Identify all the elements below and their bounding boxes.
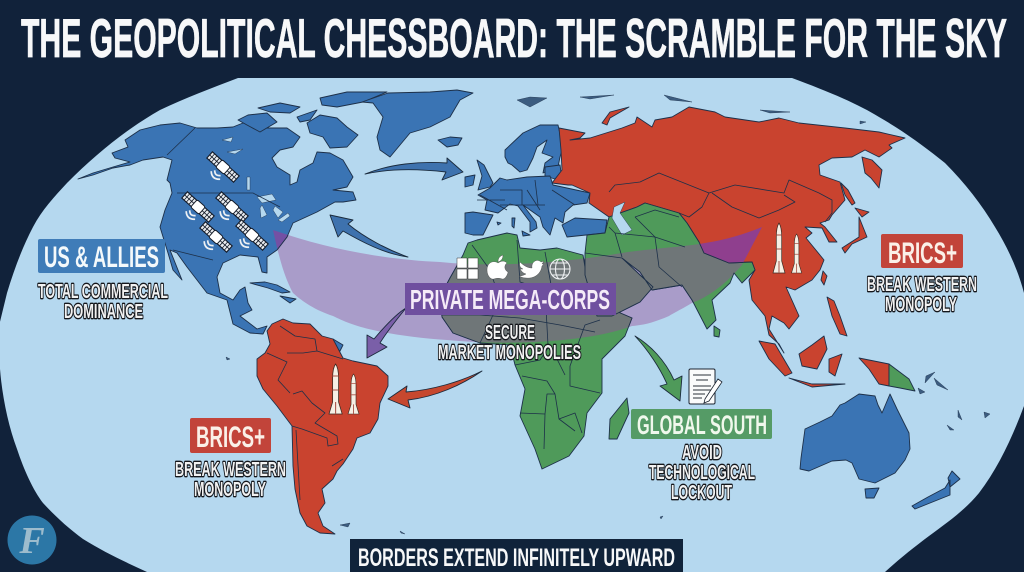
label: US and Allies xyxy=(38,239,168,323)
Kamchatka xyxy=(862,157,882,188)
Sri Lanka xyxy=(714,326,720,337)
label: BRICS plus, South America: BREAK WESTERN xyxy=(175,459,286,481)
Novaya Zemlya xyxy=(602,107,629,125)
footer banner xyxy=(350,539,683,572)
label: BRICS plus, South America: BRICS+ xyxy=(196,421,265,454)
Britain and Ireland xyxy=(465,160,493,190)
Arctic islands xyxy=(238,92,387,148)
Middle East, Central and South Asia xyxy=(585,203,755,329)
land: blue US and allies xyxy=(78,90,960,509)
label: Global South: TECHNOLOGICAL xyxy=(649,462,755,484)
label: BRICS plus, South America: MONOPOLY xyxy=(194,479,266,501)
label: Global South: LOCKOUT xyxy=(671,482,732,504)
Baltic states xyxy=(545,165,561,179)
logo badge: F xyxy=(18,520,45,562)
land: green Global South xyxy=(440,203,915,469)
icons: tech company logos xyxy=(457,255,570,279)
label: Private Mega-Corps: SECURE xyxy=(485,322,535,344)
arrow: red to South America xyxy=(388,371,482,408)
Madagascar xyxy=(609,398,629,439)
label: US and Allies: DOMINANCE xyxy=(64,301,143,323)
arrow: mega-corps to North America xyxy=(330,215,408,257)
purple satellite band xyxy=(273,227,762,343)
label: Global South: GLOBAL SOUTH xyxy=(637,410,767,440)
label: BRICS plus, Asia: BRICS+ xyxy=(888,237,957,270)
icon: satellites over North America xyxy=(175,151,269,259)
icon: petition document with pen xyxy=(689,369,722,404)
label: US and Allies: US & ALLIES xyxy=(44,241,159,274)
Papua New Guinea xyxy=(889,364,915,391)
Africa xyxy=(440,233,632,469)
arrow: North America to Europe xyxy=(365,158,463,180)
inland seas and lakes xyxy=(222,137,632,235)
label: Private Mega-Corps: MARKET MONOPOLIES xyxy=(438,342,581,364)
icon: windows xyxy=(457,258,478,279)
icon: globe xyxy=(550,259,570,279)
label: BRICS plus, Asia xyxy=(867,234,977,316)
arrow: mega-corps to South America xyxy=(367,308,406,358)
Caribbean xyxy=(250,282,296,303)
label: Private Mega-Corps: PRIVATE MEGA-CORPS xyxy=(410,284,610,315)
label: Global South: AVOID xyxy=(682,442,722,464)
icon: rockets over China xyxy=(773,223,802,273)
land: red BRICS plus xyxy=(257,107,905,534)
icon: bird xyxy=(519,260,544,278)
icon: rockets over Brazil xyxy=(329,364,359,414)
Australia, Tasmania and New Zealand xyxy=(800,394,960,509)
Sakhalin xyxy=(841,183,855,205)
Greenland and Iceland xyxy=(362,90,473,157)
Continental Europe xyxy=(478,176,590,235)
Russia, Central Asia and China xyxy=(552,107,905,353)
Mediterranean islands xyxy=(497,218,530,236)
French Guiana xyxy=(333,339,343,351)
label: BRICS plus, South America xyxy=(175,418,286,501)
Taiwan and Philippines xyxy=(821,271,847,336)
footer banner: BORDERS EXTEND INFINITELY UPWARD xyxy=(358,544,675,572)
Spain xyxy=(465,212,493,235)
logo badge xyxy=(8,516,56,564)
Japan xyxy=(842,208,869,253)
label: US and Allies: TOTAL COMMERCIAL xyxy=(38,281,168,303)
icon: apple xyxy=(487,255,508,279)
label: BRICS plus, Asia: MONOPOLY xyxy=(885,294,957,316)
small polar and ocean islands xyxy=(226,95,990,534)
Indonesia xyxy=(759,336,889,387)
label: Global South xyxy=(631,409,772,504)
label: Private Mega-Corps xyxy=(405,283,616,364)
arrow: green to Global South xyxy=(635,336,682,401)
North America xyxy=(78,123,356,334)
South America xyxy=(257,319,388,534)
Scandinavia xyxy=(505,125,563,173)
country borders xyxy=(167,128,832,500)
overlapping band tint on land xyxy=(273,227,762,343)
Turkey xyxy=(562,218,607,237)
